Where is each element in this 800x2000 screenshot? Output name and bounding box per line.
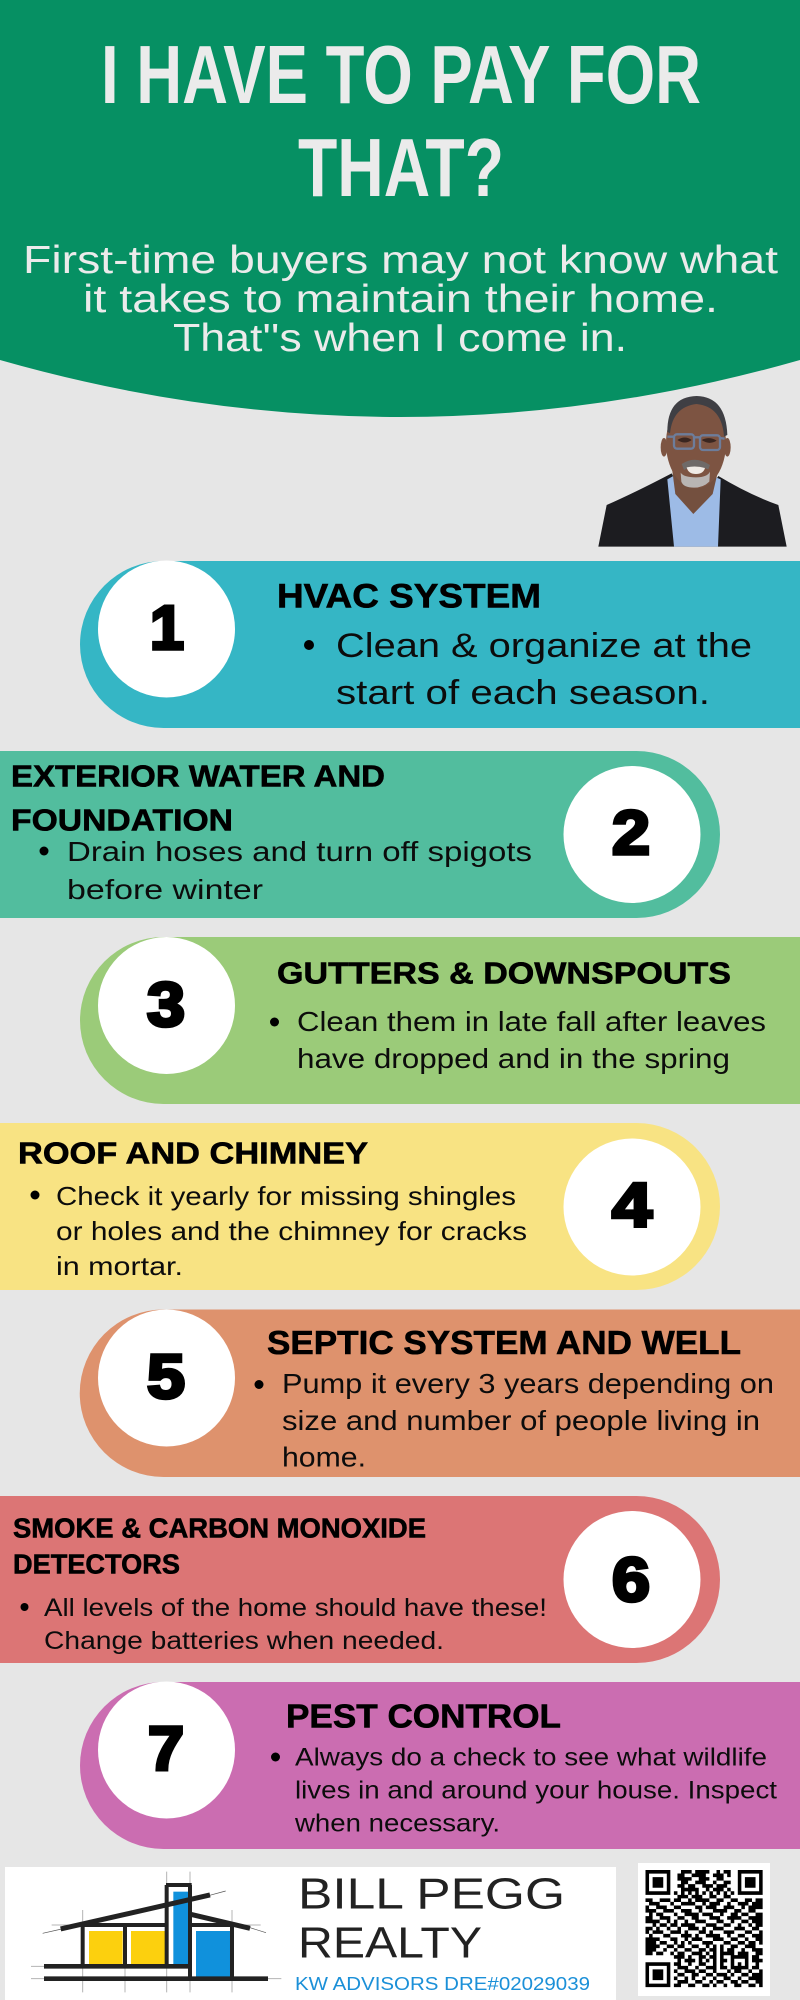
- number badge 7: [98, 1682, 235, 1818]
- license line: KW ADVISORS DRE#02029039: [295, 1974, 590, 1994]
- bullet text: have dropped and in the spring: [297, 1043, 730, 1074]
- panel: smoke and carbon monoxide detectors: [0, 1496, 720, 1663]
- panel: gutters and downspouts: [80, 937, 800, 1104]
- number badge 6: 6: [612, 1546, 650, 1615]
- heading: EXTERIOR WATER AND: [11, 758, 385, 794]
- bullet text: Clean & organize at the: [336, 627, 752, 665]
- number badge 2: [564, 766, 700, 903]
- bullet text: size and number of people living in: [282, 1405, 760, 1436]
- heading: FOUNDATION: [11, 802, 233, 838]
- bullet text: or holes and the chimney for cracks: [56, 1216, 527, 1246]
- number badge 6: [564, 1511, 700, 1648]
- panel: septic system and well: [80, 1310, 800, 1477]
- heading: SEPTIC SYSTEM AND WELL: [267, 1324, 741, 1361]
- portrait photo: [598, 396, 787, 547]
- subtitle: it takes to maintain their home.: [83, 278, 718, 321]
- company name: [298, 1870, 565, 1968]
- title: [101, 28, 701, 214]
- title: THAT?: [298, 121, 504, 214]
- bullet text: before winter: [67, 874, 263, 905]
- bullet text: Drain hoses and turn off spigots: [67, 836, 532, 867]
- bullet text: lives in and around your house. Inspect: [295, 1776, 777, 1804]
- number badge 7: 7: [148, 1715, 184, 1784]
- heading: ROOF AND CHIMNEY: [18, 1136, 368, 1170]
- number badge 3: 3: [147, 971, 185, 1040]
- icon: house logo: [31, 1872, 281, 1992]
- heading: SMOKE & CARBON MONOXIDE: [13, 1512, 426, 1544]
- bullet text: Check it yearly for missing shingles: [56, 1181, 516, 1211]
- number badge 2: 2: [612, 799, 650, 868]
- bullet text: [40, 836, 532, 905]
- heading: DETECTORS: [13, 1548, 180, 1580]
- number badge 4: [564, 1138, 700, 1276]
- subtitle: [23, 239, 778, 360]
- bullet text: Pump it every 3 years depending on: [282, 1368, 774, 1399]
- bullet text: [30, 1181, 527, 1281]
- company name: BILL PEGG: [298, 1870, 565, 1918]
- panel: roof and chimney: [0, 1123, 720, 1290]
- bullet text: start of each season.: [336, 674, 710, 712]
- panel: HVAC system: [80, 560, 800, 728]
- panel: exterior water and foundation: [0, 751, 720, 918]
- panel: pest control: [80, 1682, 800, 1849]
- number badge 1: 1: [150, 594, 184, 663]
- bullet text: when necessary.: [294, 1810, 500, 1838]
- bullet text: Always do a check to see what wildlife: [295, 1744, 767, 1772]
- QR code: [638, 1863, 770, 1996]
- header banner: [0, 0, 800, 417]
- bullet text: All levels of the home should have these!: [44, 1594, 547, 1622]
- bullet text: [304, 627, 752, 712]
- bullet text: [271, 1744, 777, 1838]
- number badge 1: [98, 560, 235, 698]
- bullet text: Change batteries when needed.: [44, 1627, 444, 1655]
- number badge 5: [98, 1310, 235, 1446]
- company name: REALTY: [298, 1918, 482, 1968]
- heading: PEST CONTROL: [286, 1698, 561, 1734]
- bullet text: [254, 1368, 774, 1472]
- number badge 4: 4: [612, 1171, 653, 1240]
- bullet text: home.: [282, 1442, 366, 1472]
- bullet text: [270, 1006, 766, 1074]
- footer logo card: [5, 1867, 616, 2000]
- heading: HVAC SYSTEM: [277, 578, 541, 616]
- heading: GUTTERS & DOWNSPOUTS: [277, 956, 731, 990]
- subtitle: First-time buyers may not know what: [23, 239, 778, 282]
- bullet text: [20, 1594, 547, 1655]
- bullet text: Clean them in late fall after leaves: [297, 1006, 766, 1037]
- number badge 3: [98, 937, 235, 1074]
- subtitle: That''s when I come in.: [173, 317, 627, 360]
- heading: [13, 1512, 426, 1580]
- number badge 5: 5: [147, 1343, 185, 1412]
- bullet text: in mortar.: [56, 1251, 183, 1281]
- heading: [11, 758, 385, 838]
